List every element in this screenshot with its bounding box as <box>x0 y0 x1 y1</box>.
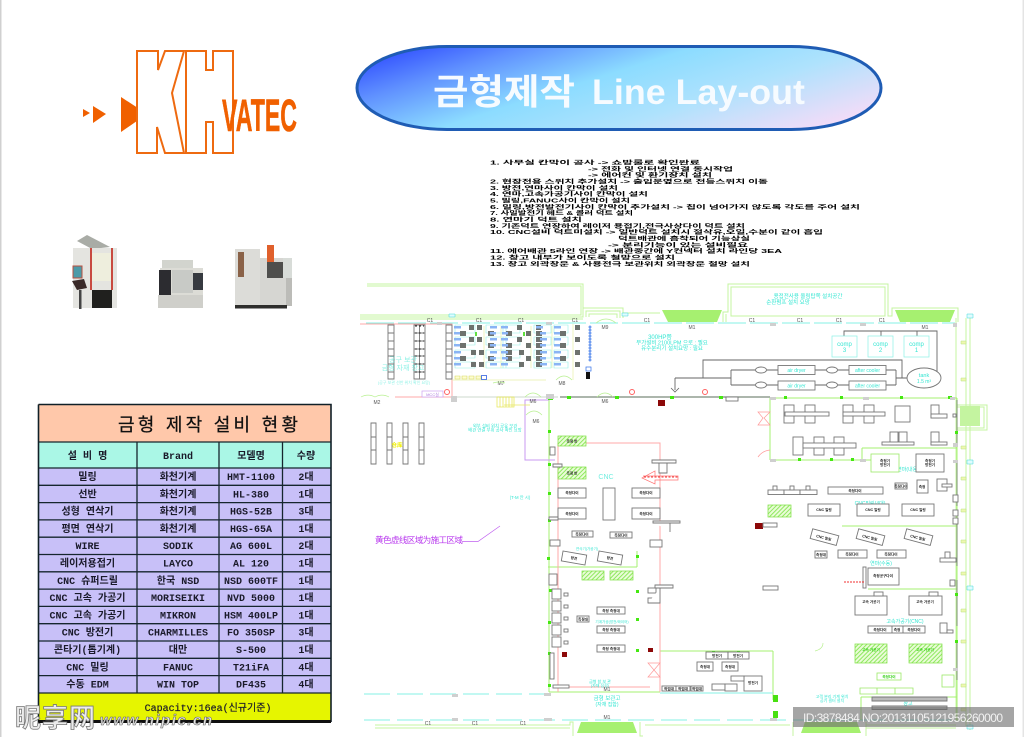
machine name labels: 고속 가공기 <box>862 599 880 604</box>
annotation texts <box>468 292 924 708</box>
zone labels: M1 <box>604 687 611 693</box>
machine name labels: CNC 밀링 <box>816 507 832 512</box>
table body rows: 화천기계 <box>160 470 196 484</box>
dryers and coolers: tank <box>919 373 929 379</box>
watermark: nipic logo <box>15 703 212 733</box>
machine name labels: 고속 가공기 <box>862 647 880 652</box>
compressors: 1 <box>915 348 919 354</box>
annotation texts: (자재 집합) <box>591 682 610 688</box>
machine name labels: 측정다이 <box>882 674 896 679</box>
table body rows: LAYCO <box>163 560 193 570</box>
dryers and coolers: air dryer <box>787 384 806 390</box>
table body rows <box>38 468 331 693</box>
zone labels: M6 <box>602 399 609 405</box>
zone labels <box>374 318 929 727</box>
zone labels: C1 <box>572 318 578 324</box>
table body rows: HGS-52B <box>230 508 272 519</box>
machine name labels: 방전기 <box>712 653 722 658</box>
table header row: 수량 <box>297 449 315 463</box>
pipe arrow <box>671 388 679 392</box>
annotation texts: 창고 <box>903 700 913 707</box>
instruction list: 2. 현장전용 스위치 추가설치 -> 출입문옆으로 전등스위치 이동 <box>490 178 768 186</box>
machine name labels: 작업대 <box>678 686 688 691</box>
table title row: 금형 제작 설비 현황 <box>118 415 298 435</box>
machine name labels: 방전기 <box>880 462 890 467</box>
instruction list: 5. 밀링,FANUC사이 칸막이 설치 <box>490 196 630 204</box>
zone labels: C1 <box>749 318 755 324</box>
table body rows: 평면 연삭기 <box>61 522 114 536</box>
machine name labels: 방전 <box>606 555 614 561</box>
watermark: image id <box>793 707 1014 727</box>
annotation texts: 외부 설비 위치 공유 보관 <box>473 422 517 430</box>
instruction list: 13. 창고 외곽창문 & 사용전극 보관위치 외곽창문 철망 설치 <box>490 260 750 268</box>
banner heading: Line Lay-out <box>592 72 805 112</box>
annotation texts: 고속가공기(CNC) <box>886 618 924 625</box>
pale cyan zone text, left room: 공구 보관 <box>389 355 417 364</box>
table body rows: 3대 <box>298 626 314 640</box>
table body rows: WIRE <box>75 542 100 553</box>
zone labels: C1 <box>425 721 431 727</box>
machine name labels: 측정다이 <box>848 488 862 493</box>
table body rows: 1대 <box>298 608 314 622</box>
machine name labels: 측정 <box>919 484 925 489</box>
instruction list: 10. CNC설비 덕트미설치 -> 일반덕트 설치시 절삭유,오일,수분이 같이 흡입 <box>490 228 823 236</box>
table body rows: 2대 <box>298 470 314 484</box>
zone labels: M7 <box>498 381 505 387</box>
zone labels: M1 <box>689 325 696 331</box>
annotation texts: 300HP쯤 <box>648 334 672 341</box>
construction area note: 黄色虚线区域为施工区域 <box>375 534 463 545</box>
machine photo 2 <box>158 260 203 308</box>
annotation texts: CNC <box>598 474 614 481</box>
M7 M8 machining cluster <box>452 324 580 380</box>
instruction list: 3. 방전,연마사이 칸막이 설치 <box>490 184 618 192</box>
dryers and coolers <box>756 366 941 390</box>
wall marker dots <box>437 313 973 729</box>
table body rows: AL 120 <box>233 560 269 570</box>
table body rows: MORISEIKI <box>151 594 205 605</box>
machine name labels: 방전기 <box>733 653 743 658</box>
table body rows: 2대 <box>298 539 314 553</box>
compressors: 3 <box>843 348 847 354</box>
green lockers at bottom <box>773 695 778 718</box>
table body rows: 콘타기(톱기계) <box>54 643 121 657</box>
compressed air system <box>671 331 941 392</box>
dryers and coolers: after cooler <box>855 384 880 390</box>
table body rows: 화천기계 <box>160 487 196 501</box>
red flow arrows <box>444 390 865 582</box>
table body rows: 화천기계 <box>160 522 196 536</box>
machine name labels: 측정공구다이 <box>873 573 893 578</box>
air piping <box>675 331 937 390</box>
table body rows: FO 350SP <box>227 629 275 640</box>
annotation texts: 연마(내용) <box>897 466 919 473</box>
machine name labels: 측정다이 <box>565 511 579 516</box>
table body rows: 선반 <box>78 487 97 501</box>
table header row: 모델명 <box>237 449 265 463</box>
compressors: comp <box>837 342 852 348</box>
banner heading: 금형제작 <box>433 72 575 112</box>
instruction list: 9. 기존덕트 연장하여 레이저 용접기,전극사상다이 덕트 설치 <box>490 222 745 230</box>
annotation texts: 순환펌프 설치 요망 <box>766 298 810 306</box>
zone labels: C1 <box>520 721 526 727</box>
table body rows: 4대 <box>298 678 314 692</box>
zone labels: M2 <box>374 400 381 406</box>
zone labels: C1 <box>879 318 885 324</box>
table body rows: 화천기계 <box>160 505 196 519</box>
annotation texts: 용접전사용 올림탑쪽 설치공간 <box>774 292 842 300</box>
machine name labels: 측정 반 <box>567 438 578 444</box>
table body rows: CNC 방전기 <box>62 626 113 640</box>
dryers and coolers: 1.5 m³ <box>917 379 931 385</box>
table body rows: 1대 <box>298 556 314 570</box>
interior walls <box>360 323 957 720</box>
pale cyan zone text, left room: (공구 보관 선반 위치 확인 요망) <box>378 379 431 385</box>
table body rows: 4대 <box>298 660 314 674</box>
zone labels: M8 <box>559 381 566 387</box>
table body rows: CNC 고속 가공기 <box>49 591 126 605</box>
table body rows: DF435 <box>236 681 266 692</box>
table body rows: NSD 600TF <box>224 577 278 588</box>
table body rows: 레이저용접기 <box>60 556 115 570</box>
table body rows: CNC 슈퍼드릴 <box>57 574 118 588</box>
factory floor plan <box>360 284 987 736</box>
machine name labels: CNC 밀링 <box>865 507 881 512</box>
watermark: image id: ID:3878484 NO:20131105121956260000 <box>803 711 1003 725</box>
pale cyan zone text, left room <box>378 355 431 385</box>
annotation texts: 유수분리기 설치요망 : 필요 <box>641 344 703 352</box>
table body rows: T21iFA <box>233 662 269 674</box>
table body rows: 한국 NSD <box>157 574 199 588</box>
table body rows: S-500 <box>236 646 266 657</box>
table body rows: 대만 <box>169 643 187 657</box>
table title row <box>38 404 331 442</box>
zone labels: M1 <box>922 325 929 331</box>
machine name labels: 측정대 <box>578 616 588 622</box>
machine name labels <box>565 438 935 691</box>
table body rows: CHARMILLES <box>148 629 208 640</box>
annotation texts: (자재 집합) <box>595 701 619 708</box>
machine name labels: CNC 밀링 <box>910 507 926 512</box>
table body rows: 1대 <box>298 574 314 588</box>
machine name labels: 작업대 <box>664 686 674 691</box>
annotation texts: CNC밀링(4대) <box>855 500 886 507</box>
table body rows: NVD 5000 <box>227 594 275 605</box>
machine name labels: 측정다이 <box>639 511 653 516</box>
annotation texts: 공기 필터 설치 <box>820 697 844 703</box>
logo: KH VATEC <box>83 51 297 153</box>
annotation texts: 연마(수동) <box>870 560 892 567</box>
machine name labels: 측정다이 <box>575 532 589 536</box>
machine name labels: 측정다이 <box>614 532 628 538</box>
table body rows: HL-380 <box>233 490 269 501</box>
zone labels: C1 <box>476 318 482 324</box>
title banner <box>357 46 881 130</box>
watermark: nipic logo: www.nipic.cn <box>100 712 212 729</box>
machine name labels: 측정기 <box>880 458 890 463</box>
annotation texts: 연삭기(가공기) <box>576 546 598 551</box>
annotation texts: 부가설비 2100LPM 으로 : 필요 <box>636 338 708 346</box>
table header row: Brand <box>163 451 193 463</box>
machine name labels: 방전기 <box>925 462 935 467</box>
machine name labels: 측정기 <box>925 458 935 463</box>
logo letters KH outline <box>137 51 233 153</box>
zone labels: C1 <box>644 318 650 324</box>
machine photo 3 <box>235 245 292 308</box>
purple room tag: MCC실 <box>426 391 439 397</box>
instruction list: 7. 사밀발전기 헤드 & 콜러 덕트 설치 <box>490 209 633 217</box>
machine name labels: 측정대 <box>700 664 710 669</box>
instruction list: 1. 사무실 칸막이 공사 -> 쇼방룰로 확인완료 <box>490 158 700 166</box>
machine name labels: CNC 밀링 <box>862 533 878 542</box>
machine name labels: 방전기 <box>748 680 758 685</box>
machine name labels: 측정대 <box>725 664 735 669</box>
table header row: 설 비 명 <box>68 449 107 463</box>
zone labels: C1 <box>472 721 478 727</box>
annotation texts: 배관 연결 부위 공사 확인 요망 <box>468 426 522 434</box>
machine name labels: CNC 밀링 <box>816 533 832 542</box>
annotation texts: 기계가공(방전/와이어) <box>595 619 629 624</box>
machine name labels: 고속 가공기 <box>916 647 934 652</box>
logo wordmark: VATEC <box>222 90 297 141</box>
machine name labels: 측정다이 <box>894 484 908 488</box>
table body rows: 1대 <box>298 522 314 536</box>
dryers and coolers: air dryer <box>787 368 806 374</box>
machine name labels: CNC 밀링 <box>910 533 926 542</box>
machine name labels: 방전 <box>570 555 578 561</box>
ventilation trapezoids <box>577 310 980 733</box>
compressors: comp <box>873 342 888 348</box>
table body rows: AG 600L <box>230 542 272 553</box>
annotation texts: 금형 보관고 <box>594 694 620 702</box>
zone labels: M6 <box>533 419 540 425</box>
compressors <box>832 336 929 357</box>
zone labels: M1 <box>604 715 611 721</box>
table body rows: SODIK <box>163 542 193 553</box>
table body rows: 1대 <box>298 487 314 501</box>
machine name labels: 측정 측정대 <box>602 646 620 651</box>
table header row <box>38 442 331 468</box>
zone labels: M6 <box>530 399 537 405</box>
machine name labels: 작업대 <box>692 686 702 691</box>
annotation texts: 고객 분리 기계 위치 <box>816 693 849 699</box>
table body rows: FANUC <box>163 663 193 674</box>
table body rows: CNC 밀링 <box>66 661 109 674</box>
table body rows: 1대 <box>298 643 314 657</box>
annotation texts: 금형 창 보 관 <box>589 678 611 684</box>
dryers and coolers: after cooler <box>855 368 880 374</box>
icon: small arrow triangles <box>83 97 147 132</box>
table body rows: 1대 <box>298 591 314 605</box>
table body rows: 성형 연삭기 <box>61 505 114 519</box>
table capacity footer: Capacity:16ea(신규기준) <box>145 702 271 715</box>
table body rows: WIN TOP <box>157 681 199 692</box>
yellow stairs <box>497 397 530 407</box>
table body rows: HGS-65A <box>230 525 272 536</box>
table body rows: HSM 400LP <box>224 611 278 622</box>
instruction list: 4. 연마,고속가공기사이 칸막이 설치 <box>490 190 648 198</box>
instruction list: -> 분리기능이 있는 설비필요 <box>608 241 748 249</box>
machine name labels: 측정다이 <box>884 552 898 556</box>
machine name labels: 측정 반 <box>567 470 578 476</box>
instruction list: 6. 밀링,방전발전기사이 칸막이 추가설치 -> 칩이 넘어가지 않도록 각도를 주어 설치 <box>490 203 860 211</box>
door arcs <box>361 319 823 677</box>
central machinery <box>549 397 958 710</box>
machine name labels: 측정다이 <box>639 490 653 495</box>
machine name labels: 고속 가공기 <box>916 599 934 604</box>
zone labels: C1 <box>797 318 803 324</box>
machine name labels: 측정 측정대 <box>602 627 620 632</box>
blue nozzle column <box>586 326 591 379</box>
watermark: nipic logo: 昵享网 <box>15 703 95 733</box>
instruction list: -> 에어컨 및 환기장치 설치 <box>588 171 712 179</box>
construction area note <box>375 526 500 545</box>
instruction list: 11. 에어배관 5라인 연장 -> 배관중간에 Y컨넥터 설치 라인당 3EA <box>490 247 782 255</box>
machine name labels: 측정대 <box>816 552 826 557</box>
machine name labels: 측정다이 <box>565 490 579 495</box>
machine name labels: 측정다이 <box>907 627 921 632</box>
machine photos <box>72 235 292 309</box>
machine name labels: 측정다이 <box>845 552 859 556</box>
zone labels: C1 <box>518 318 524 324</box>
equipment table <box>38 404 331 723</box>
table body rows: 수동 EDM <box>66 679 109 692</box>
machine name labels: 측정 <box>894 627 900 632</box>
instruction list: -> 전화 및 인터넷 연결 동시작업 <box>588 165 733 173</box>
pale cyan zone text, left room: 금형 자재 창고 <box>382 363 425 372</box>
compressors: comp <box>909 342 924 348</box>
table body rows: 밀링 <box>78 471 97 484</box>
instruction list <box>490 158 860 268</box>
upper-left storage racks <box>371 325 452 464</box>
zone labels: C1 <box>836 318 842 324</box>
table capacity footer <box>38 693 331 721</box>
annotation texts: (T-M 안 시) <box>510 494 531 500</box>
compressors: 2 <box>879 348 883 354</box>
machine name labels: 측정다이 <box>873 627 887 632</box>
warehouse label: 仓库 <box>391 441 403 449</box>
table body rows: 3대 <box>298 505 314 519</box>
purple room tag <box>422 391 443 397</box>
machine photo 1 <box>72 235 117 309</box>
table body rows: MIKRON <box>160 611 196 622</box>
machine name labels: 측정 측정대 <box>602 608 620 613</box>
zone labels: M9 <box>602 325 609 331</box>
table body rows: HMT-1100 <box>227 473 275 484</box>
instruction list: 12. 창고 내부가 보이도록 철망으로 설치 <box>490 254 675 262</box>
zone labels: C1 <box>427 318 433 324</box>
table body rows: CNC 고속 가공기 <box>49 608 126 622</box>
building outer walls <box>360 284 987 736</box>
instruction list: 8. 연마기 덕트 설치 <box>490 216 582 224</box>
instruction list: 덕트배관에 흡착되어 기능상실 <box>618 234 750 242</box>
